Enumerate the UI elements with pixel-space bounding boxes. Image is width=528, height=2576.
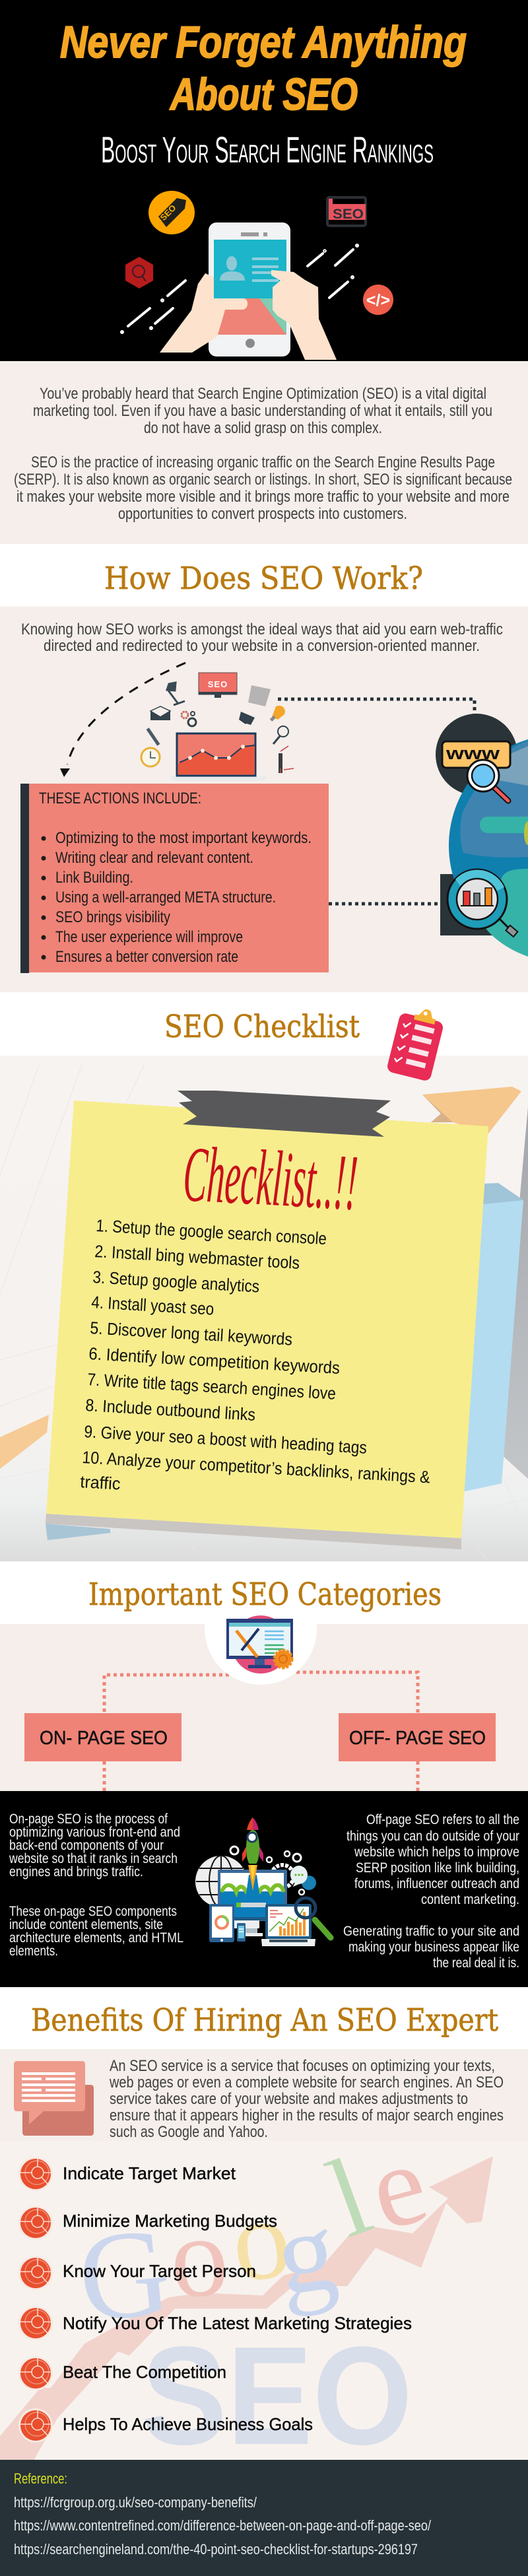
letters: Google [72, 2118, 440, 2349]
text: on-page paragraph 1: back-end components of your [9, 1838, 164, 1853]
icon: chat bubbles [290, 1866, 316, 1890]
icon: desktop [218, 1870, 287, 1936]
item: Know Your Target Person [18, 2256, 256, 2290]
letters: SEO: SEO [141, 2317, 412, 2474]
item: Indicate Target Market: Indicate Target Market [63, 2163, 236, 2183]
text: SEO service [109, 2057, 504, 2141]
icon: lamp [167, 683, 185, 705]
letters: Google: o [164, 2190, 233, 2323]
letters: Google: o [223, 2172, 298, 2307]
icon: SEO price tag: SEO [158, 203, 178, 222]
title [60, 17, 467, 119]
panel: benefits list [0, 2118, 528, 2474]
text: on-page paragraph 2: include content elements, site [9, 1917, 163, 1932]
item: Know Your Target Person: Know Your Target Person [63, 2261, 256, 2281]
icon: www search: www [446, 743, 500, 763]
text: on-page paragraph 1: engines and brings traffic. [9, 1864, 143, 1880]
item: Minimize Marketing Budgets [18, 2206, 277, 2240]
motion dashes [121, 245, 358, 333]
list: actions: Optimizing to the most important keywords. [55, 829, 312, 847]
panel: checklist [0, 1056, 528, 1561]
text: on-page paragraph 2: elements. [9, 1944, 58, 1959]
illustration: laptop chart [170, 733, 267, 781]
text: reference label: Reference: [14, 2470, 67, 2487]
icon: chart magnifier [447, 869, 517, 937]
icon: magnifier [273, 726, 288, 744]
list: checklist items: 7. Write title tags search engines love [87, 1369, 337, 1404]
panel: how SEO works [0, 607, 528, 992]
box: on-page SEO [24, 1713, 182, 1761]
icon: laptop [261, 1904, 315, 1946]
text: reference links: https://www.contentrefined.com/difference-between-on-page-and-off-page-seo/ [14, 2517, 432, 2534]
title: About SEO [169, 69, 358, 119]
text: SEO service: such as Google and Yahoo. [110, 2123, 268, 2141]
list: checklist items: 2. Install bing webmaster tools [94, 1241, 300, 1273]
icon: rocket [242, 1817, 263, 1891]
panel: category details [0, 1791, 528, 1987]
icon: gears [230, 1847, 304, 1895]
icon: compass pen [279, 746, 294, 773]
illustration: globe [436, 714, 528, 957]
item: Helps To Achieve: Helps To Achieve Business Goals [63, 2414, 313, 2434]
list: actions: Ensures a better conversion rate [55, 948, 238, 966]
list: actions: Link Building. [55, 869, 133, 887]
panel: references footer [0, 2460, 528, 2576]
icon: clipboard [386, 1003, 446, 1082]
text: off-page paragraph 1 [346, 1812, 519, 1907]
icon: SEO monitor [199, 673, 237, 698]
connector: lower dotted line [329, 902, 438, 906]
icon: paper [248, 685, 271, 706]
arrow: growth [0, 2156, 493, 2460]
decoration: grey backing note [499, 1107, 528, 1479]
item: Beat The Competition [18, 2356, 226, 2390]
heading: SEO Checklist: SEO Checklist [164, 1009, 360, 1045]
decoration: orange note [422, 1087, 521, 1134]
icon: code circle: </> [366, 291, 390, 310]
text: reference links: https://fcrgroup.org.uk/seo-company-benefits/ [14, 2494, 257, 2511]
icon: tools monitor [205, 1615, 317, 1685]
item: Beat The Competition: Beat The Competition [63, 2362, 226, 2382]
list: actions: SEO brings visibility [55, 908, 170, 926]
heading: How Does SEO Work: How Does SEO Work? [104, 560, 423, 597]
icon: code circle [363, 285, 393, 315]
connector: top dotted line [278, 699, 475, 715]
item: Indicate Target Market [18, 2157, 236, 2191]
illustration: hands [160, 270, 337, 360]
list: checklist items: 8. Include outbound links [85, 1395, 256, 1425]
title: Never Forget Anything [60, 17, 467, 67]
text: intro paragraph 1 [33, 385, 492, 437]
icon: SEO monitor: SEO [208, 679, 228, 689]
item: Notify You [18, 2306, 412, 2340]
list: checklist items: 10. Analyze your competitor’s backlinks, rankings & [82, 1447, 431, 1487]
text: intro paragraph 2: opportunities to convert prospects into customers. [118, 505, 407, 523]
panel: benefits intro [0, 2049, 528, 2141]
arrow: dashed curve [60, 663, 185, 777]
text: reference links: https://searchengineland.com/the-40-point-seo-checklist-for-startups-296197 [14, 2541, 418, 2558]
letters: Google: e [356, 2118, 440, 2254]
icon: small phone [237, 1923, 246, 1942]
text: reference links [14, 2494, 432, 2558]
heading: Important SEO Categories: Important SEO Categories [88, 1576, 442, 1613]
panel: categories [0, 1615, 528, 1791]
list: checklist items: 6. Identify low competition keywords [88, 1343, 341, 1378]
decoration: blue note [46, 1183, 523, 1540]
text: off-page paragraph 2 [343, 1924, 519, 1971]
item: Notify You: Notify You Of The Latest Marketing Strategies [63, 2313, 412, 2333]
letters: Google: l [314, 2134, 385, 2261]
icon: clock [141, 748, 160, 766]
text: how it works intro [21, 621, 503, 655]
box: off-page SEO: OFF- PAGE SEO [349, 1728, 486, 1749]
list: checklist items: 9. Give your seo a boost with heading tags [84, 1421, 368, 1458]
sticky note [46, 1091, 488, 1549]
text: on-page paragraph 2: These on-page SEO components [9, 1904, 177, 1919]
list: actions [41, 829, 312, 966]
list: actions: Writing clear and relevant content. [55, 849, 253, 867]
text: intro paragraph 1: do not have a solid grasp on this complex. [144, 419, 382, 437]
panel: header [0, 0, 528, 361]
icon: www search [442, 741, 510, 801]
icon: document speech bubble [14, 2061, 94, 2136]
illustration: phone [209, 222, 290, 356]
list: checklist items: 3. Setup google analytics [92, 1267, 260, 1297]
text: on-page paragraph 1: On-page SEO is the process of [9, 1812, 168, 1827]
icon: tablet [209, 1904, 234, 1942]
text: on-page paragraph 2 [9, 1904, 183, 1959]
illustration: SEO tools [141, 673, 294, 781]
list: actions: The user experience will improve [55, 928, 243, 946]
icon: SEO monitor [327, 197, 366, 226]
list: checklist items [80, 1215, 431, 1494]
list: checklist items: traffic [80, 1472, 121, 1494]
connector: right dotted [296, 1672, 418, 1791]
list: checklist items: 5. Discover long tail keywords [90, 1318, 293, 1349]
icon: search hexagon [125, 257, 153, 288]
icon: speech bubble [239, 712, 255, 725]
icon: pencil [146, 729, 160, 745]
icon: light bulb [270, 706, 285, 722]
box: on-page SEO: ON- PAGE SEO [40, 1728, 168, 1749]
icon: gears [182, 712, 196, 726]
watermark: SEO growth graphic [0, 2118, 493, 2474]
text: on-page paragraph 1: website so that it ranks in search [9, 1851, 178, 1866]
box: off-page SEO [339, 1713, 496, 1761]
icon: wire globe [195, 1856, 247, 1907]
callout: actions box [20, 784, 329, 973]
item: Helps To Achieve [18, 2408, 313, 2443]
letters: Google: g [269, 2185, 343, 2320]
list: actions: Using a well-arranged META structure. [55, 889, 276, 906]
panel: intro [0, 361, 528, 544]
icon: envelope [150, 706, 170, 720]
list: checklist items: 4. Install yoast seo [91, 1292, 214, 1319]
item: Minimize Marketing Budgets: Minimize Marketing Budgets [63, 2211, 277, 2231]
decoration: orange stripe [0, 1415, 49, 1469]
tape [178, 1091, 391, 1137]
illustration: rocket and devices [195, 1817, 331, 1946]
text: on-page paragraph 1 [9, 1812, 180, 1880]
text: on-page paragraph 2: architecture elements, and HTML [9, 1930, 183, 1946]
icon: magnifier [296, 1898, 331, 1938]
text: SEO service: service takes care of your website and makes adjustments to [110, 2090, 468, 2108]
text: actions heading: THESE ACTIONS INCLUDE: [39, 790, 201, 807]
connector: left dotted [104, 1675, 229, 1791]
text: intro paragraph 2 [14, 454, 512, 523]
list: checklist items: 1. Setup the google search console [96, 1215, 327, 1248]
letters: Google: G [72, 2202, 177, 2349]
icon: SEO price tag [148, 191, 195, 234]
text: on-page paragraph 1: optimizing various front-end and [9, 1825, 180, 1840]
icon: SEO monitor: SEO [333, 207, 364, 222]
